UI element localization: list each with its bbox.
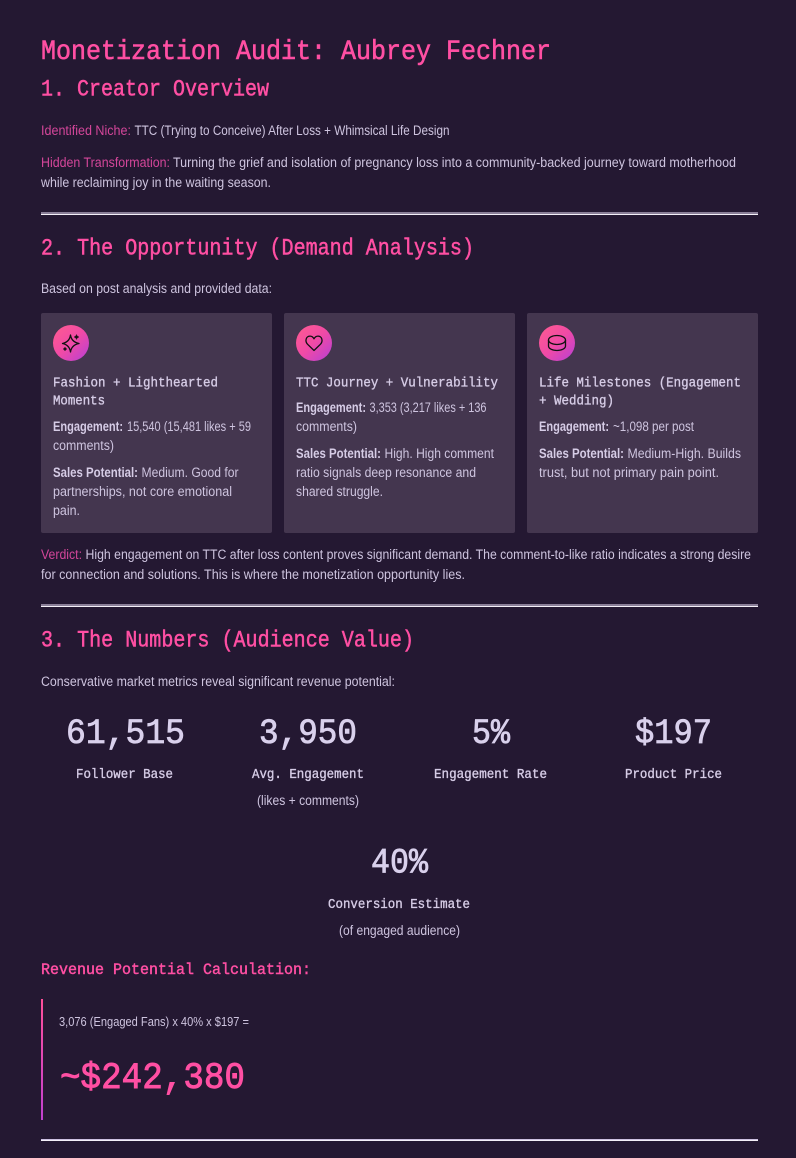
card title: Moments <box>53 394 105 410</box>
sales potential text: ratio signals deep resonance and <box>296 465 476 480</box>
text: hidden transformation: Turning the grief and isolation of pregnancy loss into a community-backed journey toward motherhood <box>173 155 736 170</box>
stat: average engagement: (likes + comments) <box>257 793 359 808</box>
heading: the numbers: 3. The Numbers (Audience Value) <box>41 628 414 654</box>
text: hidden transformation: Hidden Transformation: <box>41 155 170 170</box>
card title: Life Milestones (Engagement <box>539 376 741 392</box>
engagement text <box>296 400 486 434</box>
stat: engagement rate: 5% <box>472 714 511 754</box>
text: identified niche: Identified Niche: <box>41 123 131 138</box>
heading: revenue potential: Revenue Potential Calculation: <box>41 961 311 979</box>
heading: the opportunity: 2. The Opportunity (Demand Analysis) <box>41 236 474 262</box>
stat: average engagement: 3,950 <box>259 714 357 754</box>
panel: life milestones card <box>527 313 758 533</box>
stat: average engagement <box>252 714 364 808</box>
text: verdict: for connection and solutions. This is where the monetization opportunity lies. <box>41 567 465 582</box>
engagement text: Engagement: <box>53 419 123 434</box>
text: numbers intro: Conservative market metrics reveal significant revenue potential: <box>41 674 395 689</box>
callout: revenue calculation <box>41 999 249 1120</box>
stat: engagement rate <box>434 714 547 783</box>
engagement text: Engagement: <box>539 419 609 434</box>
title: Monetization Audit: Aubrey Fechner <box>41 37 551 68</box>
icon: ring <box>539 325 575 361</box>
card title: TTC Journey + Vulnerability <box>296 376 498 392</box>
section: the opportunity <box>41 236 758 582</box>
text: verdict <box>41 547 751 582</box>
stat: follower base <box>66 714 185 783</box>
card title: Fashion + Lighthearted <box>53 376 218 392</box>
card title: + Wedding) <box>539 394 614 410</box>
sales potential text: Sales Potential: <box>53 465 138 480</box>
engagement text: comments) <box>53 438 114 453</box>
section: the numbers <box>41 628 722 1120</box>
engagement text: comments) <box>296 419 357 434</box>
stat: product price: Product Price <box>625 768 722 783</box>
engagement text: 15,540 (15,481 likes + 59 <box>127 419 251 434</box>
sales potential text: shared struggle. <box>296 484 383 499</box>
stat: follower base: 61,515 <box>66 714 185 754</box>
card title <box>53 376 218 410</box>
panel: ttc journey card <box>284 313 515 533</box>
sales potential text: Medium. Good for <box>142 465 239 480</box>
icon: heart <box>296 325 332 361</box>
stat: follower base: Follower Base <box>76 768 173 783</box>
sales potential text: partnerships, not core emotional <box>53 484 232 499</box>
card title <box>539 376 741 410</box>
sales potential text: trust, but not primary pain point. <box>539 465 719 480</box>
icon: sparkles <box>53 325 89 361</box>
stat: engagement rate: Engagement Rate <box>434 768 547 783</box>
sales potential text <box>539 446 741 480</box>
sales potential text: Medium-High. Builds <box>628 446 741 461</box>
text: intro: Based on post analysis and provided data: <box>41 281 272 296</box>
formula: 3,076 (Engaged Fans) x 40% x $197 = <box>59 1015 249 1029</box>
section: creator overview <box>40 76 736 190</box>
sales potential text: High. High comment <box>384 446 494 461</box>
stat: product price: $197 <box>635 714 712 754</box>
text: verdict: Verdict: <box>41 547 82 562</box>
sales potential text <box>53 465 239 518</box>
stat: conversion estimate: Conversion Estimate <box>328 898 470 913</box>
stat: average engagement: Avg. Engagement <box>252 768 364 783</box>
sales potential text <box>296 446 494 499</box>
stat: conversion estimate: (of engaged audience) <box>339 923 460 938</box>
engagement text <box>53 419 251 453</box>
heading: creator overview: 1. Creator Overview <box>41 76 269 102</box>
revenue total: ~$242,380 <box>60 1058 245 1100</box>
sales potential text: Sales Potential: <box>539 446 624 461</box>
engagement text: ~1,098 per post <box>613 419 694 434</box>
engagement text: Engagement: <box>296 400 366 415</box>
stat: conversion estimate <box>328 844 470 938</box>
engagement text: 3,353 (3,217 likes + 136 <box>370 400 486 415</box>
sales potential text: pain. <box>53 503 80 518</box>
stat: conversion estimate: 40% <box>371 844 429 884</box>
text: hidden transformation <box>40 155 736 190</box>
stat: product price <box>625 714 722 783</box>
text: identified niche: TTC (Trying to Conceive) After Loss + Whimsical Life Design <box>134 123 450 138</box>
engagement text <box>539 419 694 434</box>
text: identified niche <box>41 123 450 138</box>
text: hidden transformation: while reclaiming joy in the waiting season. <box>40 175 271 190</box>
panel: fashion card <box>41 313 272 533</box>
sales potential text: Sales Potential: <box>296 446 381 461</box>
